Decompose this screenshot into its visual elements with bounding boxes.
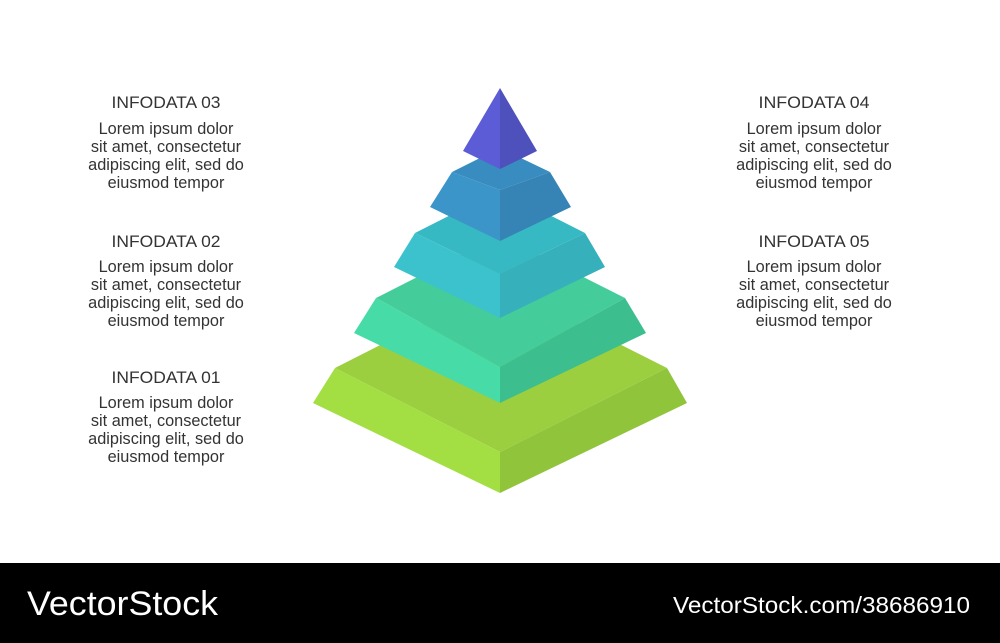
text block: infodata 01: INFODATA 01 (112, 368, 220, 387)
layer 3 (cyan) (394, 190, 605, 318)
layer 5 (apex, purple) (463, 88, 537, 169)
text block: infodata 05: Lorem ipsum dolor (747, 258, 882, 276)
text block: infodata 05: adipiscing elit, sed do (736, 294, 892, 312)
text block: infodata 05: eiusmod tempor (756, 312, 873, 330)
footer logo: VectorStock (27, 585, 219, 623)
text block: infodata 02: eiusmod tempor (108, 312, 225, 330)
text block: infodata 04: Lorem ipsum dolor (747, 120, 882, 138)
text block: infodata 02: INFODATA 02 (112, 232, 220, 251)
text block: infodata 01: Lorem ipsum dolor (99, 394, 234, 412)
text block: infodata 04: INFODATA 04 (758, 93, 870, 112)
text block: infodata 04: adipiscing elit, sed do (736, 156, 892, 174)
footer bar (0, 563, 1000, 643)
text block: infodata 04: eiusmod tempor (756, 174, 873, 192)
text block: infodata 03: INFODATA 03 (112, 93, 220, 112)
text block: infodata 04 (736, 93, 892, 192)
text block: infodata 03: Lorem ipsum dolor (99, 120, 234, 138)
text block: infodata 04: sit amet, consectetur (739, 138, 890, 156)
text block: infodata 01: adipiscing elit, sed do (88, 430, 244, 448)
text block: infodata 01 (88, 368, 244, 466)
text block: infodata 01: sit amet, consectetur (91, 412, 242, 430)
text block: infodata 05: sit amet, consectetur (739, 276, 890, 294)
layer 1 (bottom, green) (313, 284, 687, 493)
text block: infodata 05 (736, 232, 892, 330)
text block: infodata 05: INFODATA 05 (758, 232, 870, 251)
layer 2 (teal green) (354, 235, 646, 403)
text block: infodata 02: sit amet, consectetur (91, 276, 242, 294)
layer 4 (blue) (430, 148, 571, 241)
text block: infodata 03: eiusmod tempor (108, 174, 225, 192)
text block: infodata 02: adipiscing elit, sed do (88, 294, 244, 312)
text block: infodata 03: sit amet, consectetur (91, 138, 242, 156)
text block: infodata 03: adipiscing elit, sed do (88, 156, 244, 174)
text block: infodata 01: eiusmod tempor (108, 448, 225, 466)
footer url: VectorStock.com/38686910 (673, 592, 970, 618)
text block: infodata 03 (88, 93, 244, 192)
text block: infodata 02: Lorem ipsum dolor (99, 258, 234, 276)
text block: infodata 02 (88, 232, 244, 330)
pyramid (313, 88, 687, 493)
